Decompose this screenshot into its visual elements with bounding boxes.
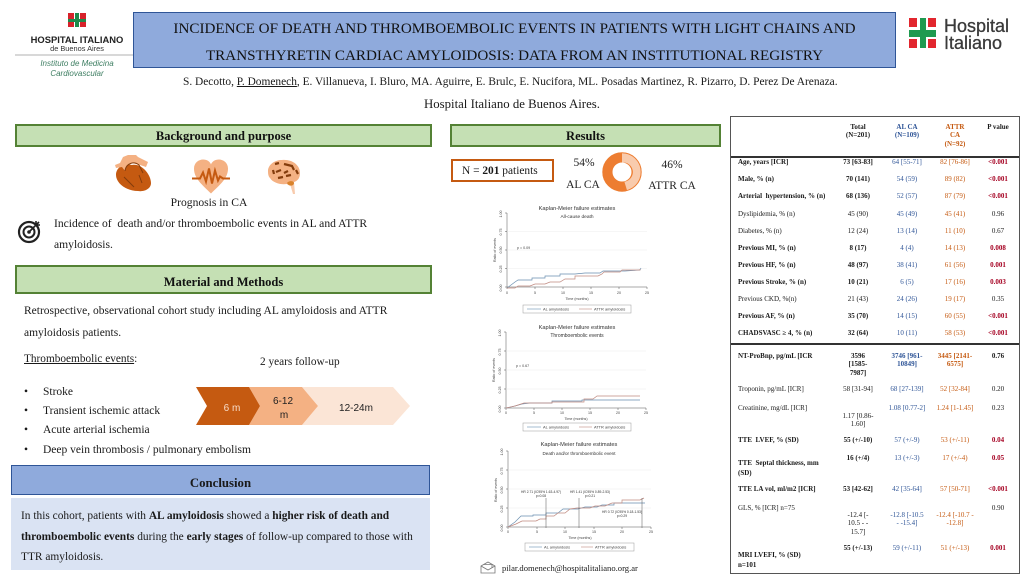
text: study design: Retrospective, observational cohort study including AL amyloidosis and ATTR [24, 305, 387, 317]
chart: KM thromboembolic events: 10 [560, 411, 564, 415]
heading: Material and Methods [15, 265, 432, 294]
table rows: 58 [31-94] [843, 385, 873, 393]
table rows: 10 (21) [848, 278, 868, 286]
table rows: (N=92) [945, 140, 965, 148]
table rows: 0.76 [992, 352, 1004, 360]
donut chart: AL vs ATTR: ATTR CA [648, 180, 696, 192]
table rows: 13 (14) [897, 227, 917, 235]
logo: Hospital Italiano de Buenos Aires: Cardiovascular [50, 69, 104, 78]
chart: KM death and/or thromboembolic event: 0.50 [500, 486, 504, 494]
chart: KM all-cause death: 15 [589, 291, 593, 295]
table rows: Troponin, pg/mL [ICR] [738, 385, 804, 393]
table rows: 70 (141) [846, 175, 870, 183]
table rows: 55 (+/-13) [844, 544, 872, 552]
table rows: <0.001 [988, 175, 1008, 183]
timeline chevrons: 6-12 [273, 396, 293, 407]
callout: patient count [451, 159, 554, 182]
chart: KM all-cause death: 0.00 [499, 284, 503, 292]
chart: KM death and/or thromboembolic event: Time (months) [568, 536, 592, 540]
table rows: - -15.4] [896, 519, 918, 527]
chart: KM all-cause death: 0.25 [499, 266, 503, 272]
chart: KM thromboembolic events: 5 [533, 411, 535, 415]
heading: Material and Methods: Material and Methods [164, 275, 283, 289]
chart: KM thromboembolic events: Time (months) [564, 417, 588, 421]
text: follow-up label: 2 years follow-up [260, 356, 340, 368]
icon: heart with pulse [192, 160, 230, 194]
table rows: NT-ProBnp, pg/mL [ICR [738, 352, 812, 360]
table rows: -12.4 [-10.7 - [936, 511, 974, 519]
table rows: 24 (26) [897, 295, 917, 303]
table rows: 3445 [2141- [938, 352, 972, 360]
table rows: 60 (55) [945, 312, 965, 320]
table rows: CA [950, 131, 960, 139]
table rows: 10.5 - - [848, 519, 868, 527]
chart: KM death and/or thromboembolic event: 1.00 [500, 448, 504, 456]
table rows: 0.90 [992, 504, 1004, 512]
chart: KM death and/or thromboembolic event: 25 [649, 530, 653, 534]
table rows: 45 (41) [945, 210, 965, 218]
text: study design [24, 305, 388, 339]
table rows: Previous CKD, %(n) [738, 295, 797, 303]
list: thromboembolic events: • [24, 405, 28, 417]
table rows: 21 (43) [848, 295, 868, 303]
list: thromboembolic events: • [24, 444, 28, 456]
list: thromboembolic events: • [24, 386, 28, 398]
authors: S. Decotto, P. Domenech, E. Villanueva, I. Bluro, MA. Aguirre, E. Brulc, E. Nucifora, ML. Posadas Martinez, R. Pizarro, D. Perez De Arenaza. [183, 76, 838, 88]
list: thromboembolic events: Stroke [43, 386, 73, 398]
timeline chevrons: 6 m [224, 403, 240, 414]
table rows: 14 (13) [945, 244, 965, 252]
table rows: 19 (17) [945, 295, 965, 303]
heading: Conclusion [11, 465, 430, 495]
table rows: <0.001 [988, 158, 1008, 166]
panel: conclusion text [11, 498, 430, 570]
table rows: 0.003 [990, 278, 1006, 286]
chart: KM death and/or thromboembolic event: 10 [563, 530, 567, 534]
table rows: 42 [35-64] [892, 485, 922, 493]
chart: KM death and/or thromboembolic event: HR 2.71 (IC95% 1.63-4.97) [521, 490, 561, 494]
table rows: Male, % (n) [738, 175, 774, 183]
chart: KM all-cause death: Time (months) [565, 297, 589, 301]
table rows: 17 (16) [945, 278, 965, 286]
chart: KM all-cause death: 25 [645, 291, 649, 295]
text: purpose [54, 217, 368, 251]
chart: KM death and/or thromboembolic event: 15 [592, 530, 596, 534]
table rows: 55 (+/-10) [844, 436, 872, 444]
panel: conclusion text: TTR amyloidosis. [21, 551, 103, 563]
table rows: [1585- [849, 360, 867, 368]
table rows: 0.20 [992, 385, 1004, 393]
table rows: 45 (90) [848, 210, 868, 218]
title banner: TRANSTHYRETIN CARDIAC AMYLOIDOSIS: DATA FROM AN INSTITUTIONAL REGISTRY [206, 48, 823, 64]
chart: KM thromboembolic events: Kaplan-Meier failure estimates [539, 325, 616, 331]
table rows: -12.4 [- [848, 511, 868, 519]
table rows: 0.008 [990, 244, 1006, 252]
chart: KM all-cause death: 0.50 [499, 246, 503, 254]
heading: Results: Results [566, 129, 605, 143]
table rows: Previous HF, % (n) [738, 261, 796, 269]
table rows: TTE Septal thickness, mm [738, 459, 819, 467]
chart: KM all-cause death [493, 206, 649, 314]
caption: Prognosis in CA: Prognosis in CA [171, 196, 247, 209]
table rows: Previous AF, % (n) [738, 312, 795, 320]
chart: KM thromboembolic events: AL amyloidosis [543, 424, 569, 430]
table rows: 0.04 [992, 436, 1004, 444]
table rows: 4 (4) [900, 244, 914, 252]
table rows: 58 (53) [945, 329, 965, 337]
chart: KM thromboembolic events: 0.25 [498, 386, 502, 394]
donut chart: AL vs ATTR: AL CA [566, 179, 601, 191]
heading: Conclusion: Conclusion [190, 476, 251, 490]
table rows: 87 (79) [945, 192, 965, 200]
chart: KM thromboembolic events: 15 [588, 411, 592, 415]
table rows: <0.001 [988, 485, 1008, 493]
chart: KM thromboembolic events: 1.00 [498, 330, 502, 336]
table rows: -12.8] [947, 519, 963, 527]
table rows: 8 (17) [850, 244, 866, 252]
chart: KM all-cause death: All-cause death [560, 214, 594, 220]
icon: brain [268, 160, 300, 194]
icon: anatomical heart [115, 155, 151, 192]
table rows: 6 (5) [900, 278, 914, 286]
panel: conclusion text: thromboembolic events during the early stages of follow-up compared to those with [21, 531, 413, 543]
chart: KM thromboembolic events: ATTR amyloidosis [594, 424, 625, 430]
panel: patient characteristics table [730, 116, 1020, 574]
callout: patient count: N = 201 patients [462, 165, 538, 177]
table rows: 48 (97) [848, 261, 868, 269]
chart: KM death and/or thromboembolic event: 0.75 [500, 468, 504, 474]
chart: KM death and/or thromboembolic event: 0.00 [500, 524, 504, 532]
table rows: 53 (+/-11) [941, 436, 969, 444]
donut chart: AL vs ATTR [566, 152, 696, 192]
table rows: n=101 [738, 560, 756, 568]
table rows: 0.67 [992, 227, 1004, 235]
table rows: <0.001 [988, 312, 1008, 320]
list: thromboembolic events [24, 386, 251, 456]
chart: KM death and/or thromboembolic event: p=0.29 [617, 514, 627, 518]
table rows: 11 (10) [945, 227, 965, 235]
title banner: INCIDENCE OF DEATH AND THROMBOEMBOLIC EVENTS IN PATIENTS WITH LIGHT CHAINS AND [173, 21, 856, 37]
logo: Hospital Italiano [909, 17, 1009, 50]
table rows: 38 (41) [897, 261, 917, 269]
table rows: Arterial hypertension, % (n) [738, 192, 825, 200]
table rows: Total [850, 123, 866, 131]
chart: KM thromboembolic events: 0.50 [498, 368, 502, 374]
table rows: Age, years [ICR] [738, 158, 788, 166]
chart: KM death and/or thromboembolic event: AL amyloidosis [544, 544, 570, 550]
table rows: 73 [63-83] [843, 158, 873, 166]
chart: KM death and/or thromboembolic event: 0.25 [500, 506, 504, 512]
table rows: 54 (59) [897, 175, 917, 183]
table rows: 61 (56) [945, 261, 965, 269]
table rows: 32 (64) [848, 329, 868, 337]
chart: KM all-cause death: 5 [534, 291, 536, 295]
divider: table header rule [731, 156, 1019, 158]
table rows: (SD) [738, 469, 752, 477]
table rows: 0.05 [992, 454, 1004, 462]
title banner [133, 12, 896, 68]
chart: KM all-cause death: 0.75 [499, 228, 503, 236]
chart: KM all-cause death: Kaplan-Meier failure estimates [539, 206, 616, 212]
table rows: 13 (+/-3) [894, 454, 920, 462]
text: thromboembolic events label: Thromboembolic events: [24, 353, 137, 365]
donut chart: AL vs ATTR: 46% [661, 159, 683, 171]
chart: KM all-cause death: AL amyloidosis [543, 306, 569, 312]
table rows: Diabetes, % (n) [738, 227, 782, 235]
table rows: 52 [32-84] [940, 385, 970, 393]
table rows: 1.08 [0.77-2] [889, 404, 925, 412]
chart: KM death and/or thromboembolic event: Kaplan-Meier failure estimates [541, 442, 618, 448]
table rows: 0.001 [990, 544, 1006, 552]
table rows: 35 (70) [848, 312, 868, 320]
table rows: 17 (+/-4) [942, 454, 968, 462]
table rows: 51 (+/-13) [941, 544, 969, 552]
table rows: TTE LVEF, % (SD) [738, 436, 799, 444]
table rows: 89 (82) [945, 175, 965, 183]
donut chart: AL vs ATTR: 54% [573, 157, 595, 169]
table rows: 10 (11) [897, 329, 917, 337]
table rows: 57 (+/-9) [894, 436, 920, 444]
list: thromboembolic events: Transient ischemic attack [43, 405, 160, 417]
chart: KM death and/or thromboembolic event: Death and/or thromboembolic event [542, 451, 616, 456]
table rows: 59 (+/-11) [893, 544, 921, 552]
chart: KM death and/or thromboembolic event [494, 442, 653, 552]
chart: KM all-cause death: 0 [506, 291, 508, 295]
table rows: 6575] [947, 360, 963, 368]
table rows: ATTR [946, 123, 964, 131]
table rows: 7987] [850, 369, 866, 377]
chart: KM thromboembolic events: 0 [505, 411, 507, 415]
logo: Hospital Italiano de Buenos Aires [15, 13, 133, 78]
table rows: AL CA [896, 123, 918, 131]
chart: KM thromboembolic events [492, 325, 648, 432]
table rows: (N=201) [846, 131, 870, 139]
chart: KM death and/or thromboembolic event: HR 0.72 (IC95% 0.18-1.53) [602, 510, 642, 514]
table rows: 68 [27-139] [890, 385, 924, 393]
table rows: <0.001 [988, 329, 1008, 337]
table rows: 3596 [851, 352, 865, 360]
table rows: 3746 [961- [892, 352, 922, 360]
text: purpose: amyloidosis. [54, 238, 113, 251]
list: thromboembolic events: • [24, 424, 28, 436]
chart: KM all-cause death: ATTR amyloidosis [594, 306, 625, 312]
table rows: <0.001 [988, 192, 1008, 200]
table rows: -12.8 [-10.5 [890, 511, 924, 519]
table rows: GLS, % [ICR] n=75 [738, 504, 795, 512]
table rows: 1.60] [851, 420, 865, 428]
table rows: 53 [42-62] [843, 485, 873, 493]
timeline chevrons: 12-24m [339, 403, 373, 414]
chart: KM death and/or thromboembolic event: HR 1.41 (IC95% 0.89-2.53) [570, 490, 610, 494]
divider: section rule [731, 343, 1019, 344]
chart: KM death and/or thromboembolic event: 0 [507, 530, 509, 534]
table rows: 0.23 [992, 404, 1004, 412]
table rows: CHADSVASC ≥ 4, % (n) [738, 329, 812, 337]
timeline chevrons [196, 387, 410, 425]
chart: KM all-cause death: p = 0.09 [517, 246, 530, 250]
chart: KM thromboembolic events: 0.00 [498, 406, 502, 412]
text: study design: amyloidosis patients. [24, 327, 121, 339]
chart: KM death and/or thromboembolic event: ATTR amyloidosis [595, 544, 626, 550]
chart: KM death and/or thromboembolic event: Ratio of events [494, 478, 498, 502]
logo: Hospital Italiano de Buenos Aires: HOSPITAL ITALIANO [31, 34, 123, 45]
table rows: Previous MI, % (n) [738, 244, 796, 252]
text: purpose: Incidence of death and/or thromboembolic events in AL and ATTR [54, 217, 367, 230]
chart: KM all-cause death: Ratio of events [493, 238, 497, 262]
contact email: pilar.domenech@hospitalitaliano.org.ar [502, 563, 638, 573]
timeline chevrons: m [280, 410, 288, 421]
chart: KM all-cause death: 20 [617, 291, 621, 295]
chart: KM thromboembolic events: Ratio of events [492, 358, 496, 382]
heading: Background and purpose [15, 124, 432, 147]
table rows: 57 [50-71] [940, 485, 970, 493]
table rows: 52 (57) [897, 192, 917, 200]
table rows: Dyslipidemia, % (n) [738, 210, 795, 218]
heading: Background and purpose: Background and purpose [156, 129, 291, 143]
table rows: 45 (49) [897, 210, 917, 218]
table rows: 68 (136) [846, 192, 870, 200]
chart: KM death and/or thromboembolic event: p=0.08 [536, 494, 546, 498]
chart: KM thromboembolic events: 20 [616, 411, 620, 415]
table rows: 0.35 [992, 295, 1004, 303]
table rows: 64 [55-71] [892, 158, 922, 166]
chart: KM thromboembolic events: 0.75 [498, 348, 502, 356]
logo: Hospital Italiano de Buenos Aires: Instituto de Medicina [40, 59, 114, 68]
chart: KM all-cause death: 1.00 [499, 210, 503, 218]
table rows: 0.001 [990, 261, 1006, 269]
panel: conclusion text: In this cohort, patients with AL amyloidosis showed a higher risk of death and [21, 510, 389, 522]
list: thromboembolic events: Acute arterial ischemia [43, 424, 150, 436]
chart: KM thromboembolic events: Thromboembolic events [550, 333, 604, 339]
chart: KM death and/or thromboembolic event: 5 [536, 530, 538, 534]
table rows: Previous Stroke, % (n) [738, 278, 806, 286]
affiliation: Hospital Italiano de Buenos Aires. [424, 97, 600, 111]
table rows: MRI LVEFI, % (SD) [738, 551, 801, 559]
list: thromboembolic events: Deep vein thrombosis / pulmonary embolism [43, 444, 251, 456]
table rows: 1.17 [0.86- [843, 412, 873, 420]
heading: Results [450, 124, 721, 147]
table rows: 10849] [897, 360, 917, 368]
table rows: 15.7] [851, 528, 865, 536]
chart: KM thromboembolic events: 25 [644, 411, 648, 415]
table rows: (N=109) [895, 131, 919, 139]
table rows: Creatinine, mg/dL [ICR] [738, 404, 807, 412]
logo: Hospital Italiano de Buenos Aires: de Buenos Aires [50, 44, 104, 53]
chart: KM death and/or thromboembolic event: p=0.21 [585, 494, 595, 498]
chart: KM death and/or thromboembolic event: 20 [620, 530, 624, 534]
chart: KM all-cause death: 10 [561, 291, 565, 295]
icon: envelope [480, 562, 496, 574]
table rows: 12 (24) [848, 227, 868, 235]
chart: KM thromboembolic events: p = 0.67 [516, 364, 529, 368]
table rows: 16 (+/4) [847, 454, 869, 462]
table rows: TTE LA vol, ml/m2 [ICR] [738, 485, 816, 493]
table rows: 1.24 [1-1.45] [937, 404, 973, 412]
table rows: 82 [76-86] [940, 158, 970, 166]
table rows: P value [987, 123, 1009, 131]
table rows: 14 (15) [897, 312, 917, 320]
icon: target [18, 220, 40, 244]
table rows: 0.96 [992, 210, 1004, 218]
